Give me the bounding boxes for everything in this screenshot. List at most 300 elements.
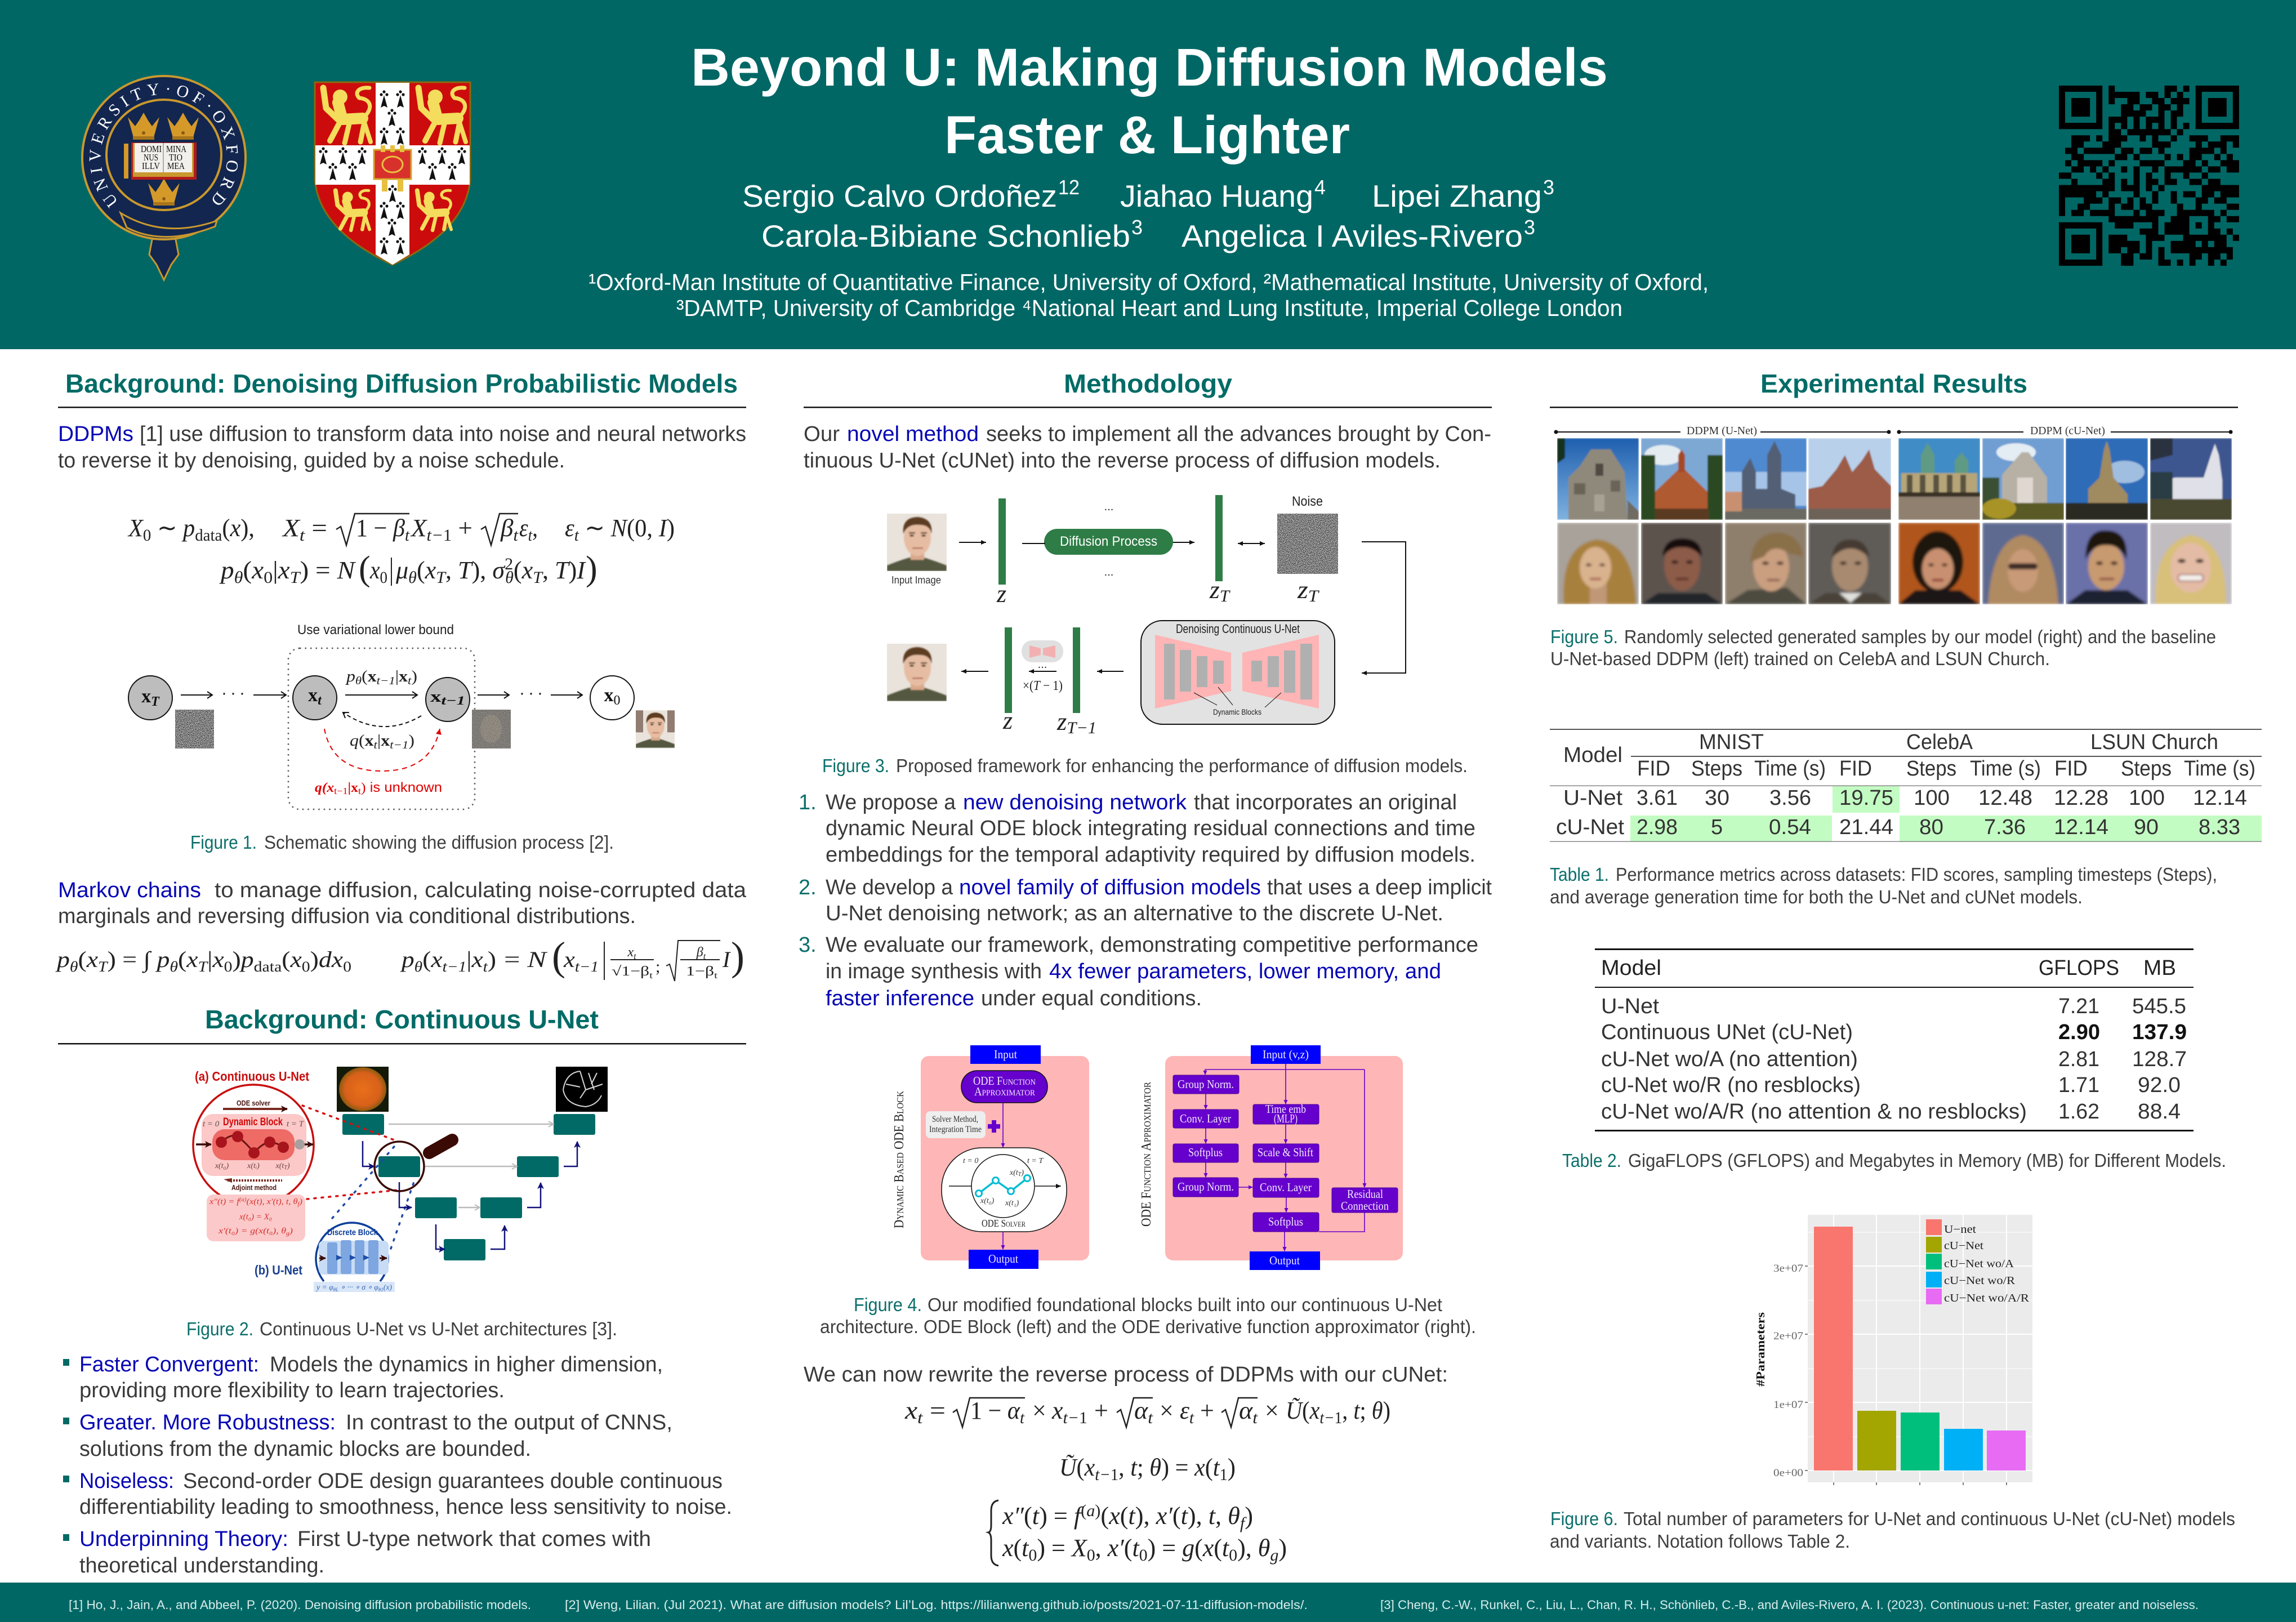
box: input (v,z)	[1251, 1045, 1321, 1064]
circle: continuous U-Net detail: Adjoint method	[231, 1183, 277, 1192]
equation: U tilde: Ũ(x	[1059, 1454, 1095, 1481]
text: DDPMs intro: [1] use diffusion to transform data into noise and neural networks	[140, 422, 746, 446]
table header: MB	[2143, 956, 2176, 980]
text: novel method intro: seeks to implement all the advances brought by Con-	[986, 422, 1491, 446]
label: q unknown: )	[361, 781, 366, 795]
equation: marginal: (	[178, 947, 186, 972]
box: output: Output	[1269, 1254, 1300, 1267]
caption: figure 6	[1550, 1508, 2235, 1552]
equation: forward diffusion: p	[183, 514, 195, 542]
latent bars	[998, 495, 1223, 713]
row: cU-Net: 0.54	[1769, 816, 1811, 839]
equation: second-order ODE system: x(t	[1002, 1534, 1028, 1562]
bullet: Underpinning Theory: theoretical understanding.	[79, 1554, 324, 1578]
equation: conditional: x	[564, 947, 574, 972]
row: U-Net	[1601, 995, 2186, 1018]
up and down arrows	[363, 1141, 577, 1249]
equation: reverse step: t	[1252, 1409, 1258, 1427]
y axis tick labels: 1e+07	[1773, 1399, 1803, 1411]
table header: FID	[2054, 757, 2088, 781]
caption: figure 3: Proposed framework for enhancing the performance of diffusion models.	[896, 755, 1468, 776]
row: cU-Net: 2.98	[1637, 816, 1678, 839]
circle: continuous U-Net detail: )	[287, 1162, 290, 1170]
caption: figure 5: U-Net-based DDPM (left) trained on CelebA and LSUN Church.	[1550, 648, 2050, 669]
item 1: embeddings for the temporal adaptivity required by diffusion models.	[826, 843, 1475, 867]
label: q: q(x	[350, 732, 373, 750]
circle: discrete block: θ1	[378, 1287, 384, 1293]
box: solver method	[926, 1111, 986, 1138]
equation: second-order ODE system: θ	[1258, 1534, 1270, 1562]
equation: forward diffusion: x),	[230, 514, 255, 542]
equation: reverse process: θ	[408, 568, 417, 587]
circle: continuous U-Net detail: x(t	[276, 1162, 284, 1170]
equation: reverse step: t	[1020, 1409, 1025, 1427]
equation: second-order ODE system: ) =	[1148, 1534, 1182, 1562]
box: ODE solver: x(t	[1010, 1169, 1018, 1177]
row: cU-Net: 12.14	[2054, 816, 2108, 839]
table header: Model	[1601, 956, 1661, 980]
label: q: |	[377, 732, 381, 750]
equation: forward diffusion: data	[195, 526, 222, 545]
equation: reverse step: =	[923, 1397, 946, 1424]
legend: cU−Net wo/A	[1944, 1258, 2014, 1270]
equation: reverse process: N	[337, 556, 354, 584]
image: face U-Net 2	[1641, 523, 1723, 604]
icon: University of Oxford seal: MINA	[166, 144, 187, 154]
text: rewrite reverse process: We can now rewrite the reverse process of DDPMs with our cUNet:	[804, 1363, 1448, 1387]
icon: University of Oxford seal: DOMI	[141, 144, 162, 154]
math labels: ×(T − 1)	[1023, 679, 1063, 693]
label: noise: Noise	[1292, 494, 1323, 509]
equation: conditional: x	[431, 947, 441, 972]
figure 1: diffusion process schematic: ···	[221, 684, 245, 702]
equation: conditional: = N	[504, 947, 548, 972]
image: face U-Net 3	[1725, 523, 1807, 604]
box: denoising continuous U-Net	[1141, 621, 1335, 724]
label: q unknown: q(x	[315, 781, 334, 795]
figure 4: ODE block	[892, 1045, 1089, 1269]
equation: conditional: )	[488, 947, 496, 972]
authors: 4	[1314, 176, 1326, 199]
image: church U-Net 4	[1808, 438, 1891, 520]
y axis tick labels: 0e+00	[1773, 1467, 1803, 1479]
affiliations: ³DAMTP, University of Cambridge ⁴National Heart and Lung Institute, Imperial College London	[676, 295, 1622, 321]
equation: reverse step: ε	[1180, 1397, 1189, 1424]
item 1	[799, 791, 1475, 867]
label: q unknown: t	[358, 786, 361, 796]
equation: U tilde: t; θ) = x(t	[1130, 1454, 1220, 1481]
caption: figure 2: Figure 2.	[186, 1318, 253, 1339]
row: Continuous UNet: 2.90	[2058, 1021, 2100, 1044]
image: input face	[887, 514, 947, 571]
bullet: Faster Convergent: providing more flexibility to learn trajectories.	[79, 1379, 505, 1402]
oval: ODE function approximator: Approximator	[974, 1085, 1035, 1098]
row: wo/A	[1601, 1048, 2187, 1071]
equation: second-order ODE system: (	[1081, 1501, 1086, 1520]
box: conv layer 2	[1253, 1178, 1319, 1197]
box: conv layer	[1173, 1109, 1238, 1128]
label: q: t	[374, 739, 377, 751]
equation: U tilde: t−1	[1095, 1465, 1119, 1484]
item 3: 3.	[799, 933, 817, 957]
authors: 3	[1131, 216, 1143, 239]
caption: figure 1: Schematic showing the diffusion process [2].	[264, 832, 614, 853]
table header: LSUN Church	[2090, 730, 2218, 754]
box: ODE equations: f	[298, 1201, 300, 1207]
panel: background DDPM	[55, 369, 747, 981]
bullet: Noiseless: differentiability leading to smoothness, hence less sensitivity to noise.	[79, 1495, 732, 1519]
equation: reverse step: α	[1239, 1397, 1252, 1424]
node: x_t	[293, 676, 337, 720]
equation: second-order ODE system: 0	[1139, 1546, 1148, 1565]
equation: conditional: I	[722, 947, 731, 972]
figure 1: diffusion process schematic: Use variational lower bound	[297, 622, 454, 638]
bar: cU-Net wo/A	[1901, 1412, 1940, 1471]
bar: cU-Net wo/A/R	[1987, 1431, 2026, 1471]
bar: U-net	[1814, 1227, 1853, 1471]
box: input (v,z): Input (v,z)	[1263, 1048, 1309, 1061]
box: ODE equations	[207, 1195, 305, 1241]
equation: marginal: x	[212, 947, 222, 972]
label: p theta: x	[399, 668, 408, 685]
heading: Denoising Diffusion Probabilistic Models: Background: Denoising Diffusion Probabilistic Models	[65, 369, 738, 398]
row: cU-Net: 80	[1919, 816, 1943, 839]
blue dotted connectors	[332, 1143, 416, 1249]
icon: University of Oxford seal	[81, 75, 247, 282]
text: DDPMs intro	[58, 422, 746, 473]
skip connections	[389, 1124, 553, 1207]
box: denoising continuous U-Net: Denoising Continuous U-Net	[1176, 622, 1300, 636]
equation: second-order ODE system: 0	[1229, 1546, 1237, 1565]
box: time embedding: Time emb	[1265, 1102, 1306, 1116]
icon: University of Oxford seal: NUS	[144, 152, 158, 163]
equation: forward diffusion: t	[405, 526, 410, 545]
equation: reverse step: ×	[1265, 1397, 1279, 1424]
equation: marginal: 0	[224, 959, 233, 975]
item 3: in image synthesis with	[826, 960, 1042, 983]
circle: continuous U-Net detail: ODE solver	[237, 1099, 270, 1107]
authors: Jiahao Huang	[1120, 179, 1313, 213]
bullet: Greater Robustness: solutions from the dynamic blocks are bounded.	[79, 1437, 531, 1461]
text: DDPMs intro: to reverse it by denoising, guided by a noise schedule.	[58, 449, 565, 473]
equation: U tilde: 1	[1220, 1465, 1228, 1484]
equation: reverse process: (	[514, 556, 522, 584]
image: face cU-Net 3	[2066, 523, 2148, 604]
bullet: Faster Convergent: Models the dynamics in higher dimension,	[270, 1353, 663, 1376]
equation: forward diffusion: X	[283, 514, 298, 542]
caption: figure 6: Total number of parameters for U-Net and continuous U-Net (cU-Net) models	[1624, 1508, 2235, 1529]
equation: second-order ODE system: ) =	[1037, 1534, 1072, 1562]
equation: reverse process: (	[417, 556, 425, 584]
node: x_0: x	[604, 685, 614, 706]
title	[691, 38, 1608, 165]
numbered list: contributions	[799, 791, 1492, 1010]
header banner	[0, 0, 2296, 349]
equation: conditional: (	[422, 947, 431, 972]
legend: U−net	[1944, 1223, 1977, 1236]
equation: forward diffusion: 1 − β	[356, 514, 405, 542]
box: ODE equations: x(t₀) = X₀	[239, 1213, 272, 1222]
row: wo/R: 92.0	[2138, 1073, 2181, 1097]
row: wo/A/R: 88.4	[2138, 1100, 2181, 1124]
equation: reverse step: t	[917, 1409, 923, 1427]
box: ODE solver: x(t₁)	[1005, 1199, 1019, 1207]
equation: reverse process	[219, 550, 598, 588]
row: U-Net: 3.56	[1769, 786, 1811, 810]
math labels: z	[1210, 576, 1219, 604]
circle: discrete block: ∘ ··· ∘ σ ∘ φ	[338, 1284, 378, 1292]
image: output face	[887, 644, 947, 701]
item 2: that uses a deep implicit	[1267, 876, 1492, 899]
bar: cU-Net wo/R	[1944, 1429, 1983, 1471]
box: input: Input	[994, 1048, 1017, 1061]
row: U-Net: 3.61	[1637, 786, 1678, 810]
equation: conditional: √1−β	[612, 964, 640, 979]
equation: forward diffusion: t	[528, 526, 533, 545]
equation: marginal: (	[282, 947, 290, 972]
label: q unknown: t−1	[334, 786, 348, 796]
bullet: Faster Convergent	[63, 1353, 663, 1402]
image: face cU-Net 2	[1982, 523, 2064, 604]
row: cU-Net: 7.36	[1984, 816, 2026, 839]
equation: reverse process: )	[586, 550, 598, 588]
rotated label: ODE function approximator: ODE Function Approximator	[1139, 1081, 1154, 1227]
figure 3: proposed framework	[887, 494, 1406, 737]
bullet: Underpinning Theory: First U-type network that comes with	[297, 1527, 651, 1551]
box: ODE equations: )	[289, 1227, 293, 1236]
image: vessel segmentation output	[556, 1067, 608, 1112]
equation: reverse process: p	[221, 556, 233, 584]
table header: MNIST	[1699, 730, 1764, 754]
panel: experimental results	[1550, 369, 2262, 1552]
circle: continuous U-Net detail: t = 0	[203, 1120, 220, 1129]
arrows	[959, 542, 1406, 673]
table header: Time (s)	[2184, 757, 2255, 781]
equation: forward diffusion: ,	[532, 514, 538, 542]
equation: reverse step: ×	[1032, 1397, 1046, 1424]
equation: marginal: x	[290, 947, 300, 972]
image: clean face	[636, 710, 675, 748]
equation: conditional: t	[649, 971, 653, 981]
box: softplus 2: Softplus	[1268, 1215, 1303, 1228]
circle: continuous U-Net detail	[193, 1069, 314, 1205]
heading: Experimental Results: Experimental Results	[1760, 369, 2027, 398]
equation: second-order ODE system: )	[1245, 1502, 1253, 1530]
text: novel method intro: tinuous U-Net (cUNet) into the reverse process of diffusion models.	[804, 449, 1441, 473]
image: church cU-Net 2	[1982, 438, 2064, 520]
equation: forward diffusion: =	[305, 514, 327, 542]
equation: reverse process: T), σ	[458, 556, 505, 584]
figure 3: proposed framework: ...	[1038, 658, 1047, 671]
text: Markov chains: to manage diffusion, calculating noise-corrupted data	[215, 879, 747, 902]
label: q unknown: |x	[348, 781, 358, 795]
authors	[742, 176, 1554, 253]
image: church cU-Net 1	[1898, 438, 1980, 520]
legend	[1926, 1219, 2030, 1304]
node: x_0	[590, 676, 634, 720]
box: ODE solver: )	[1020, 1169, 1024, 1177]
legend: cU−Net wo/R	[1944, 1275, 2016, 1287]
equation: reverse process: x	[252, 556, 263, 584]
row: wo/R	[1601, 1073, 2181, 1097]
equation: forward diffusion: +	[452, 514, 472, 542]
caption: figure 4: Figure 4.	[854, 1294, 922, 1315]
item 1: dynamic Neural ODE block integrating residual connections and time	[826, 817, 1475, 840]
caption: figure 5: Figure 5.	[1550, 626, 1618, 647]
equation: second-order ODE system: ),	[1237, 1534, 1258, 1562]
y axis tick labels	[1773, 1263, 1803, 1479]
row: U-Net: 12.48	[1978, 786, 2032, 810]
image: face U-Net 1	[1557, 523, 1639, 604]
image: face cU-Net 4	[2150, 523, 2232, 604]
figure 2: architecture diagram	[193, 1067, 608, 1293]
figure 1: diffusion process schematic: ···	[519, 684, 543, 702]
authors: 3	[1543, 176, 1554, 199]
equation: second-order ODE system: )	[1278, 1534, 1287, 1562]
row: U-Net: 12.14	[2193, 786, 2247, 810]
bullet: Noiseless: Second-order ODE design guarantees double continuous	[183, 1469, 723, 1493]
oval: ODE function approximator: ODE Function	[973, 1074, 1036, 1088]
math labels: T	[1220, 587, 1231, 605]
row: U-Net: 7.21	[2058, 995, 2099, 1018]
circle: continuous U-Net detail: x(t₀)	[215, 1162, 229, 1170]
label: p theta: θ	[355, 675, 362, 687]
equation: marginal: θ	[170, 959, 178, 975]
table header: GFLOPS	[2039, 956, 2119, 980]
row: U-Net: 100	[1914, 786, 1950, 810]
equation: forward diffusion: ∼	[579, 514, 611, 542]
affiliations: ¹Oxford-Man Institute of Quantitative Finance, University of Oxford, ²Mathematical Institute, University of Oxford,	[589, 269, 1709, 295]
equation: marginal: 0	[343, 959, 351, 975]
panel: methodology	[799, 369, 1492, 1566]
icon: University of Oxford seal: UNIVERSITY·OF·OXFORD	[89, 83, 238, 208]
image: church U-Net 2	[1641, 438, 1723, 520]
text: Markov chains: Markov chains	[58, 879, 201, 902]
figure 3: proposed framework: Input Image	[891, 574, 941, 586]
equation: forward diffusion: ∼	[151, 514, 183, 542]
row: U-Net: 30	[1705, 786, 1729, 810]
item 3	[799, 933, 1478, 1010]
equation: reverse process: |	[273, 556, 278, 584]
equation: conditional: t	[714, 971, 718, 981]
text: Markov chains	[58, 879, 747, 928]
equation: reverse process: ,	[542, 556, 555, 584]
equation: forward diffusion: t	[574, 526, 579, 545]
item 3: faster inference	[826, 987, 974, 1010]
label: p theta: t	[408, 675, 412, 687]
caption: figure 2: Continuous U-Net vs U-Net architectures [3].	[260, 1318, 617, 1339]
equation: conditional: 1−β	[686, 964, 707, 979]
row: U-Net	[1563, 786, 2247, 810]
equation: second-order ODE system: (	[1100, 1502, 1109, 1530]
equation: reverse step: t−1	[1063, 1409, 1087, 1427]
heading: Methodology: Methodology	[1064, 369, 1232, 398]
row: Continuous UNet: Continuous UNet (cU-Net)	[1601, 1021, 1853, 1044]
equation: conditional: t−1	[443, 959, 466, 975]
item 2: novel family of diffusion models	[959, 876, 1261, 899]
caption: table 1: Table 1.	[1550, 864, 1609, 885]
equation: second-order ODE system: x′(t	[1108, 1534, 1139, 1562]
caption: figure 3: Figure 3.	[822, 755, 889, 776]
label: DDPM U-Net: DDPM (U-Net)	[1687, 425, 1757, 437]
box: input	[970, 1045, 1041, 1064]
equation: second-order ODE system: ,	[1095, 1534, 1108, 1562]
math labels: z	[1298, 576, 1307, 604]
icon: University of Oxford seal: ILLV	[142, 161, 161, 171]
label: p theta: (	[362, 668, 368, 685]
item 1: 1.	[799, 791, 817, 814]
equation: reverse process: θ	[234, 568, 243, 587]
equation: reverse process: x	[278, 556, 289, 584]
panel: continuous U-Net	[58, 1005, 746, 1578]
text: Markov chains: marginals and reversing diffusion via conditional distributions.	[58, 904, 636, 928]
equation: reverse process: ) =	[300, 556, 337, 584]
authors: 12	[1058, 176, 1080, 199]
equation: reverse process: 0	[380, 568, 387, 587]
equation: reverse step: t−1	[1319, 1409, 1343, 1427]
figure 1: diffusion process schematic	[128, 622, 675, 809]
label: DDPM cU-Net: DDPM (cU-Net)	[2030, 425, 2105, 437]
equation: reverse step: x	[1052, 1397, 1063, 1424]
equation: reverse step: ,	[1342, 1397, 1353, 1424]
equation: marginal: T	[198, 959, 208, 975]
equation: conditional: β	[697, 945, 703, 960]
table header: Steps	[1691, 757, 1742, 781]
equation: reverse process: T	[533, 568, 543, 587]
node: x_t-1: t−1	[442, 693, 465, 707]
bullet: Greater Robustness	[63, 1411, 672, 1461]
bullet: Underpinning Theory: Underpinning Theory:	[79, 1527, 288, 1551]
box: ODE equations: g	[286, 1231, 289, 1237]
equation: conditional: ;	[656, 957, 660, 976]
arrows	[181, 695, 582, 771]
circle: discrete block: y = φ	[316, 1284, 333, 1292]
row: cU-Net: 90	[2134, 816, 2159, 839]
caption: figure 4	[820, 1294, 1476, 1337]
label: p theta: )	[411, 668, 417, 685]
equation: reverse step: Ũ(x	[1286, 1397, 1321, 1424]
box: output	[969, 1250, 1038, 1269]
row: U-Net: U-Net	[1563, 786, 1622, 810]
box: ODE solver: t = T	[1027, 1157, 1044, 1165]
math labels: z	[1057, 708, 1067, 736]
equation: second-order ODE system: 0	[1087, 1546, 1095, 1565]
legend: cU−Net	[1944, 1240, 1983, 1252]
box: denoising continuous U-Net: Dynamic Blocks	[1213, 707, 1261, 716]
equation: forward diffusion: ε	[519, 514, 529, 542]
item 1: new denoising network	[963, 791, 1187, 814]
box: group norm: Group Norm.	[1178, 1077, 1234, 1091]
icon: University of Cambridge shield	[315, 82, 470, 265]
equation: reverse process: T	[436, 568, 447, 587]
image: church U-Net 3	[1725, 438, 1807, 520]
equation: second-order ODE system: x(t), x′(t), t, θ	[1109, 1502, 1240, 1530]
equation: marginal: (	[78, 947, 87, 972]
item 2: U-Net denoising network; as an alternative to the discrete U-Net.	[826, 902, 1443, 925]
equation: reverse step: ×	[1160, 1397, 1174, 1424]
box: residual connection: Connection	[1341, 1199, 1389, 1213]
row: Continuous UNet: 137.9	[2132, 1021, 2187, 1044]
equation: marginal: )	[233, 947, 241, 972]
box: softplus: Softplus	[1188, 1146, 1223, 1159]
figure 6: parameter bar chart	[1754, 1215, 2032, 1485]
equation: marginal: )	[310, 947, 319, 972]
label: q: t−1	[390, 739, 408, 751]
row: cU-Net: 5	[1711, 816, 1723, 839]
row: cU-Net: 21.44	[1839, 816, 1893, 839]
equation: forward diffusion: t	[300, 526, 305, 545]
item 1: that incorporates an original	[1194, 791, 1457, 814]
